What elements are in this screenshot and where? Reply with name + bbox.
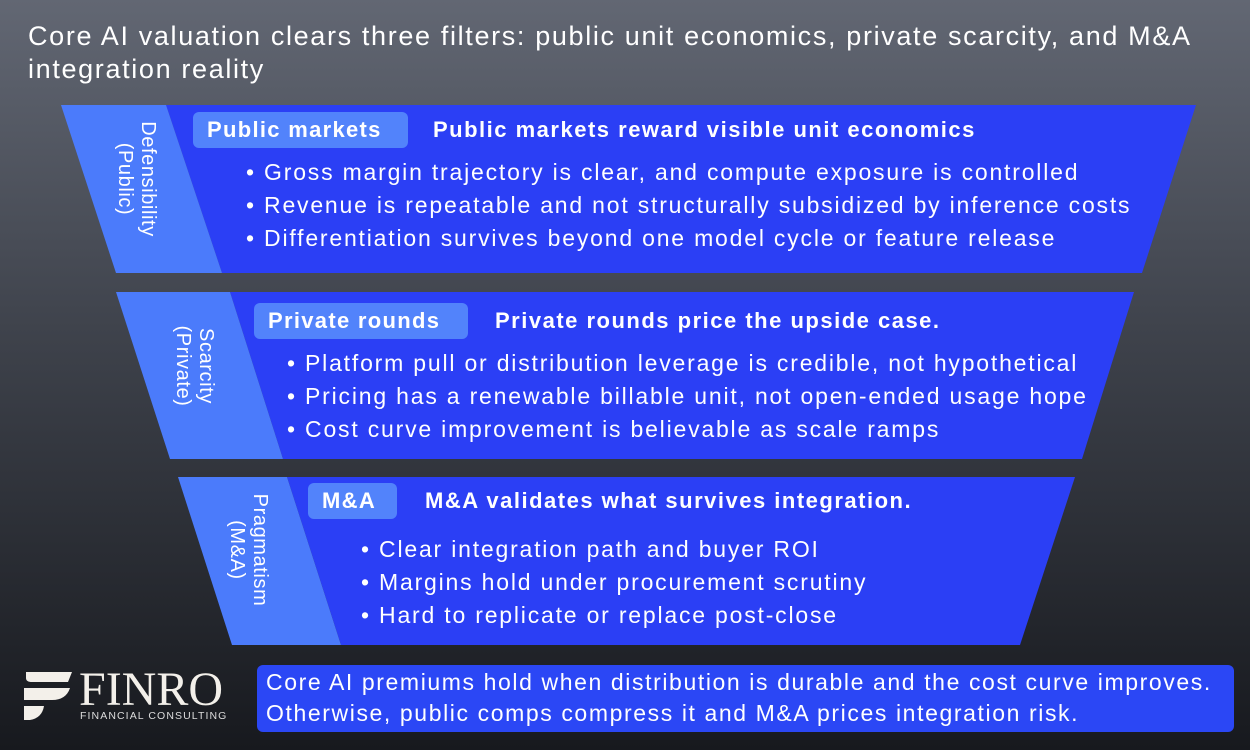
band 2 label: (Private) <box>172 326 194 406</box>
band 2 shapes <box>116 292 1134 459</box>
band 1 label: Defensibility <box>137 121 159 237</box>
logo <box>24 663 227 722</box>
band 2 label <box>172 326 217 406</box>
band 3 heading: M&A validates what survives integration. <box>425 488 912 513</box>
logo: FINANCIAL CONSULTING <box>80 710 227 722</box>
band 1 bullets: • Differentiation survives beyond one model cycle or feature release <box>246 225 1056 251</box>
band 1 shapes <box>61 105 1196 273</box>
band 1 bullets <box>246 159 1131 251</box>
band 3 label: Pragmatism <box>249 494 271 606</box>
band 2 heading: Private rounds price the upside case. <box>495 308 941 333</box>
title: Core AI valuation clears three filters: public unit economics, private scarcity, and M&A integration reality <box>28 21 1190 84</box>
band 3 shapes <box>178 477 1075 645</box>
band 2 bullets <box>287 350 1088 442</box>
band 1 heading: Public markets reward visible unit economics <box>433 117 976 142</box>
band 2 bullets: • Pricing has a renewable billable unit, not open-ended usage hope <box>287 383 1088 409</box>
band 3 pill: M&A <box>322 488 376 513</box>
band 2 label: Scarcity <box>195 328 217 404</box>
band 1 bullets: • Revenue is repeatable and not structurally subsidized by inference costs <box>246 192 1131 218</box>
band 3 label: (M&A) <box>226 520 248 580</box>
band 2 pill <box>254 303 468 339</box>
footer callout: Core AI premiums hold when distribution is durable and the cost curve improves. <box>266 669 1212 695</box>
band 2 bullets: • Platform pull or distribution leverage is credible, not hypothetical <box>287 350 1078 376</box>
band 1 bullets: • Gross margin trajectory is clear, and compute exposure is controlled <box>246 159 1079 185</box>
logo: FINRO <box>79 663 223 716</box>
band 1 label <box>114 121 159 237</box>
band 1 pill: Public markets <box>207 117 382 142</box>
band 3 pill <box>308 483 397 519</box>
band 1 label: (Public) <box>114 143 136 215</box>
band 3 bullets: • Margins hold under procurement scrutiny <box>361 569 867 595</box>
band 3 bullets: • Hard to replicate or replace post-close <box>361 602 838 628</box>
footer callout <box>257 665 1234 732</box>
band 3 bullets: • Clear integration path and buyer ROI <box>361 536 820 562</box>
band 2 bullets: • Cost curve improvement is believable as scale ramps <box>287 416 940 442</box>
footer callout: Otherwise, public comps compress it and M&A prices integration risk. <box>266 700 1079 726</box>
band 3 bullets <box>361 536 867 628</box>
band 2 pill: Private rounds <box>268 308 440 333</box>
band 1 pill <box>193 112 408 148</box>
band 3 label <box>226 494 271 606</box>
